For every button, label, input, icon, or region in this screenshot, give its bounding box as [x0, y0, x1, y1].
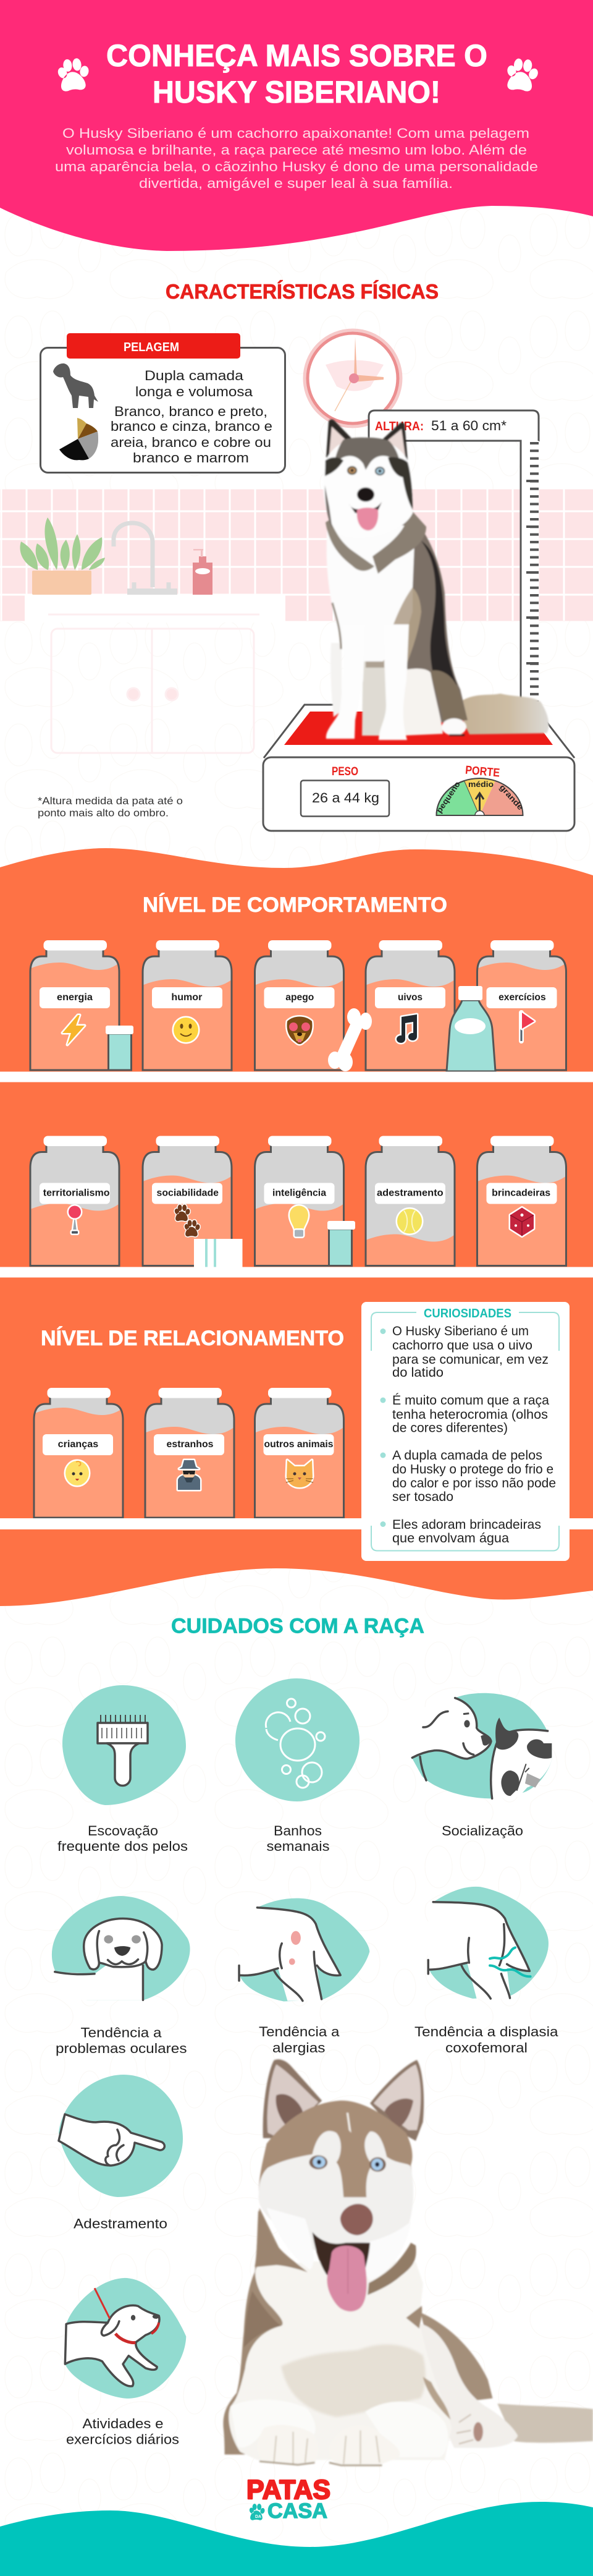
tail: [497, 2404, 593, 2442]
weighing scale: [263, 705, 574, 831]
object: mint bottle: [447, 986, 495, 1071]
icon: spy: [178, 1460, 200, 1490]
height value: 51 a 60 cm*: [431, 418, 507, 433]
label: Atividades e: [83, 2416, 163, 2431]
curiosidades text: que envolvam água: [392, 1531, 509, 1545]
jar: apego: [254, 940, 345, 1071]
icon: light bulb: [290, 1205, 308, 1236]
label: alergias: [272, 2040, 325, 2055]
panel: pelagem: [41, 333, 285, 472]
left flank: [223, 2208, 288, 2455]
icon: lightning: [62, 1015, 85, 1045]
ruff whites: [267, 2208, 314, 2269]
jar: estranhos: estranhos: [167, 1439, 214, 1450]
jar: inteligência: [254, 1136, 345, 1267]
curiosidades text: [392, 1324, 556, 1545]
eyes: [348, 467, 356, 474]
heading: características físicas: CARACTERÍSTICAS FÍSICAS: [166, 280, 439, 303]
front legs: [326, 624, 366, 739]
care: baths: [235, 1678, 360, 1854]
white face: [259, 2131, 413, 2259]
label: Tendência a displasia: [414, 2024, 558, 2039]
chest: [327, 525, 415, 661]
title: HUSKY SIBERIANO!: [153, 75, 440, 109]
section: comportamento background: [0, 848, 593, 1606]
weight value: [301, 780, 389, 816]
weight value: 26 a 44 kg: [312, 790, 379, 806]
head fur: [259, 2101, 413, 2259]
forelegs: [230, 2399, 316, 2447]
care: daily exercise: [65, 2278, 186, 2447]
label: [267, 1823, 330, 1854]
icon: bubbles: [266, 1699, 325, 1788]
icon: dice: [510, 1208, 534, 1236]
label: exercícios diários: [66, 2432, 179, 2447]
label: Socialização: [442, 1823, 523, 1838]
logo: patas da casa: DA: [255, 2515, 261, 2519]
jar: uivos: [364, 940, 456, 1071]
coat text: Dupla camada: [145, 368, 244, 383]
jar: crianças: [33, 1388, 124, 1518]
icon: flag: [521, 1013, 534, 1041]
panel: pelagem: PELAGEM: [124, 341, 179, 354]
label: Escovação: [88, 1823, 158, 1838]
care: brushing: [57, 1685, 188, 1854]
intro paragraph: O Husky Siberiano é um cachorro apaixonante! Com uma pelagem: [62, 125, 529, 141]
footer wave: [0, 2502, 593, 2576]
chest shade: [281, 2345, 426, 2417]
size gauge: médio: [468, 780, 494, 789]
curiosidades text: tenha heterocromia (olhos: [392, 1408, 548, 1422]
mouth: [313, 2232, 370, 2281]
label: [57, 1823, 188, 1854]
jar: adestramento: [364, 1136, 456, 1267]
belly: [362, 643, 386, 736]
care: hip dysplasia: [414, 1887, 558, 2055]
weight label: PESO: [332, 765, 358, 778]
size gauge: pequeno: [434, 780, 462, 815]
intro paragraph: [55, 125, 538, 191]
jar: crianças: crianças: [58, 1439, 98, 1450]
jar: uivos: uivos: [398, 992, 423, 1003]
rear back: [421, 2313, 492, 2401]
object: towel: [194, 1239, 242, 1267]
care: socialization: [408, 1693, 552, 1838]
label: semanais: [267, 1838, 330, 1854]
nose and mouth: [357, 487, 374, 502]
kitchen scene background: [0, 489, 593, 753]
coat text: longa e volumosa: [135, 384, 253, 399]
label: [56, 2025, 187, 2056]
care: allergies: [239, 1898, 369, 2055]
icon: dog in love: [287, 1016, 312, 1044]
jar: territorialismo: [30, 1136, 120, 1267]
curiosidades text: de cores diferentes): [392, 1421, 508, 1435]
intro paragraph: volumosa e brilhante, a raça parece até mesmo um lobo. Além de: [66, 142, 527, 158]
photo: lying husky: [223, 2059, 593, 2465]
label: [259, 2024, 340, 2055]
jar: energia: [30, 940, 120, 1071]
photo: standing husky: [323, 419, 549, 740]
icon: brush: [98, 1715, 148, 1785]
jar: energia: energia: [57, 992, 93, 1003]
label: Tendência a: [80, 2025, 162, 2040]
coat text: areia, branco e cobre ou: [111, 435, 271, 450]
label: Tendência a: [259, 2024, 340, 2039]
curiosidades bullets: [381, 1328, 385, 1527]
panel: curiosidades: [361, 1302, 570, 1561]
jar: brincadeiras: brincadeiras: [492, 1188, 550, 1198]
curiosidades text: A dupla camada de pelos: [392, 1448, 542, 1463]
jar: inteligência: inteligência: [272, 1188, 326, 1198]
icon: soap bottle: [193, 549, 212, 595]
heading: relacionamento: NÍVEL DE RELACIONAMENTO: [41, 1327, 344, 1350]
height label: ALTURA:: [375, 420, 424, 433]
back: [395, 507, 468, 723]
jar: brincadeiras: [476, 1136, 567, 1267]
curiosidades text: cachorro que usa o uivo: [392, 1338, 532, 1353]
jar: apego: apego: [285, 992, 314, 1003]
header band: [0, 0, 593, 251]
logo: patas da casa: PATAS: [246, 2475, 330, 2505]
jar: exercícios: [476, 940, 567, 1071]
icon: music notes: [397, 1014, 417, 1043]
size gauge: grande: [498, 783, 525, 812]
size label: PORTE: [465, 764, 500, 780]
jar: estranhos: [145, 1388, 235, 1518]
head markings: [334, 437, 400, 470]
label: [414, 2024, 558, 2055]
icon: colour pie: [59, 418, 98, 460]
icon: dog silhouette: [53, 363, 98, 408]
object: mint cylinder 2: [327, 1221, 355, 1266]
logo: patas da casa: [246, 2475, 330, 2523]
jar: territorialismo: territorialismo: [43, 1188, 110, 1198]
ears: [326, 419, 352, 459]
title: CONHEÇA MAIS SOBRE O: [106, 38, 487, 73]
icon: paw right: [505, 57, 539, 92]
left ear: [263, 2059, 322, 2138]
eyes: [309, 2156, 327, 2169]
size gauge: [434, 778, 525, 815]
label: coxofemoral: [445, 2040, 528, 2055]
icon: tennis ball: [397, 1209, 422, 1234]
jar: outros animais: outros animais: [264, 1439, 334, 1450]
curiosidades text: O Husky Siberiano é um: [392, 1324, 529, 1338]
icon: paw prints: [175, 1205, 200, 1236]
title: [106, 38, 487, 109]
icon: baby: [65, 1461, 89, 1486]
logo: patas da casa: CASA: [267, 2499, 327, 2523]
coat text: branco e cinza, branco e: [111, 419, 272, 434]
curiosidades text: do Husky o protege do frio e: [392, 1463, 553, 1476]
jar: humor: humor: [171, 992, 202, 1003]
jar: outros animais: [254, 1388, 345, 1518]
ruff patches: [326, 519, 374, 571]
haunch: [402, 669, 443, 736]
right ear: [370, 2060, 424, 2141]
intro paragraph: divertida, amigável e super leal à sua família.: [139, 176, 453, 191]
curiosidades text: ser tosado: [392, 1490, 453, 1504]
label: problemas oculares: [56, 2041, 187, 2056]
icon: cat: [286, 1460, 313, 1487]
head: [323, 437, 413, 538]
label: frequente dos pelos: [57, 1838, 188, 1854]
icon: plant: [20, 517, 105, 595]
front paws: [257, 2425, 318, 2465]
icon: paw left: [57, 57, 91, 92]
icon: smile: [174, 1018, 198, 1042]
curiosidades title: CURIOSIDADES: [424, 1307, 511, 1320]
jar object: mint cylinder: [106, 1026, 133, 1070]
shelf 3: [0, 1518, 593, 1529]
height ruler: [369, 410, 539, 703]
coat text: branco e marrom: [133, 450, 249, 465]
icon: faucet: [114, 523, 177, 594]
intro paragraph: uma aparência bela, o cãozinho Husky é dono de uma personalidade: [55, 159, 538, 174]
icon: pin: [69, 1205, 81, 1234]
jar: adestramento: adestramento: [377, 1188, 444, 1198]
rear leg: [418, 2323, 518, 2448]
icon: pointing hand: [59, 2114, 164, 2166]
note: height measure: *Altura medida da pata até o: [38, 795, 183, 807]
clock: [305, 330, 401, 427]
curiosidades text: do latido: [392, 1366, 444, 1380]
curiosidades text: do calor e por isso não pode: [392, 1476, 556, 1490]
shelf 1: [0, 1072, 593, 1082]
tail: [460, 694, 549, 734]
label: Banhos: [274, 1823, 322, 1838]
curiosidades text: Eles adoram brincadeiras: [392, 1518, 541, 1532]
jar: sociabilidade: [142, 1136, 232, 1267]
label: [66, 2416, 179, 2447]
heading: cuidados: CUIDADOS COM A RAÇA: [171, 1615, 424, 1638]
neck bands: [254, 2211, 308, 2272]
tongue: [327, 2246, 367, 2311]
curiosidades text: para se comunicar, em vez: [392, 1353, 549, 1367]
jar: humor: [142, 940, 232, 1071]
care: training: [59, 2075, 183, 2232]
jar: exercícios: exercícios: [498, 992, 546, 1003]
note: height measure: ponto mais alto do ombro.: [38, 807, 169, 818]
coat text: [111, 368, 272, 465]
curiosidades text: É muito comum que a raça: [392, 1393, 549, 1408]
note: height measure: [38, 795, 183, 818]
heading: comportamento: NÍVEL DE COMPORTAMENTO: [143, 893, 447, 917]
cabinet: [51, 629, 254, 753]
coat text: Branco, branco e preto,: [114, 404, 267, 419]
jar: sociabilidade: sociabilidade: [157, 1188, 219, 1198]
label: Adestramento: [74, 2216, 167, 2232]
body: [229, 2261, 452, 2460]
shelf 2: [0, 1267, 593, 1277]
nose: [340, 2204, 373, 2235]
object: bone: [328, 1008, 372, 1071]
care: eye problems: [52, 1896, 190, 2056]
